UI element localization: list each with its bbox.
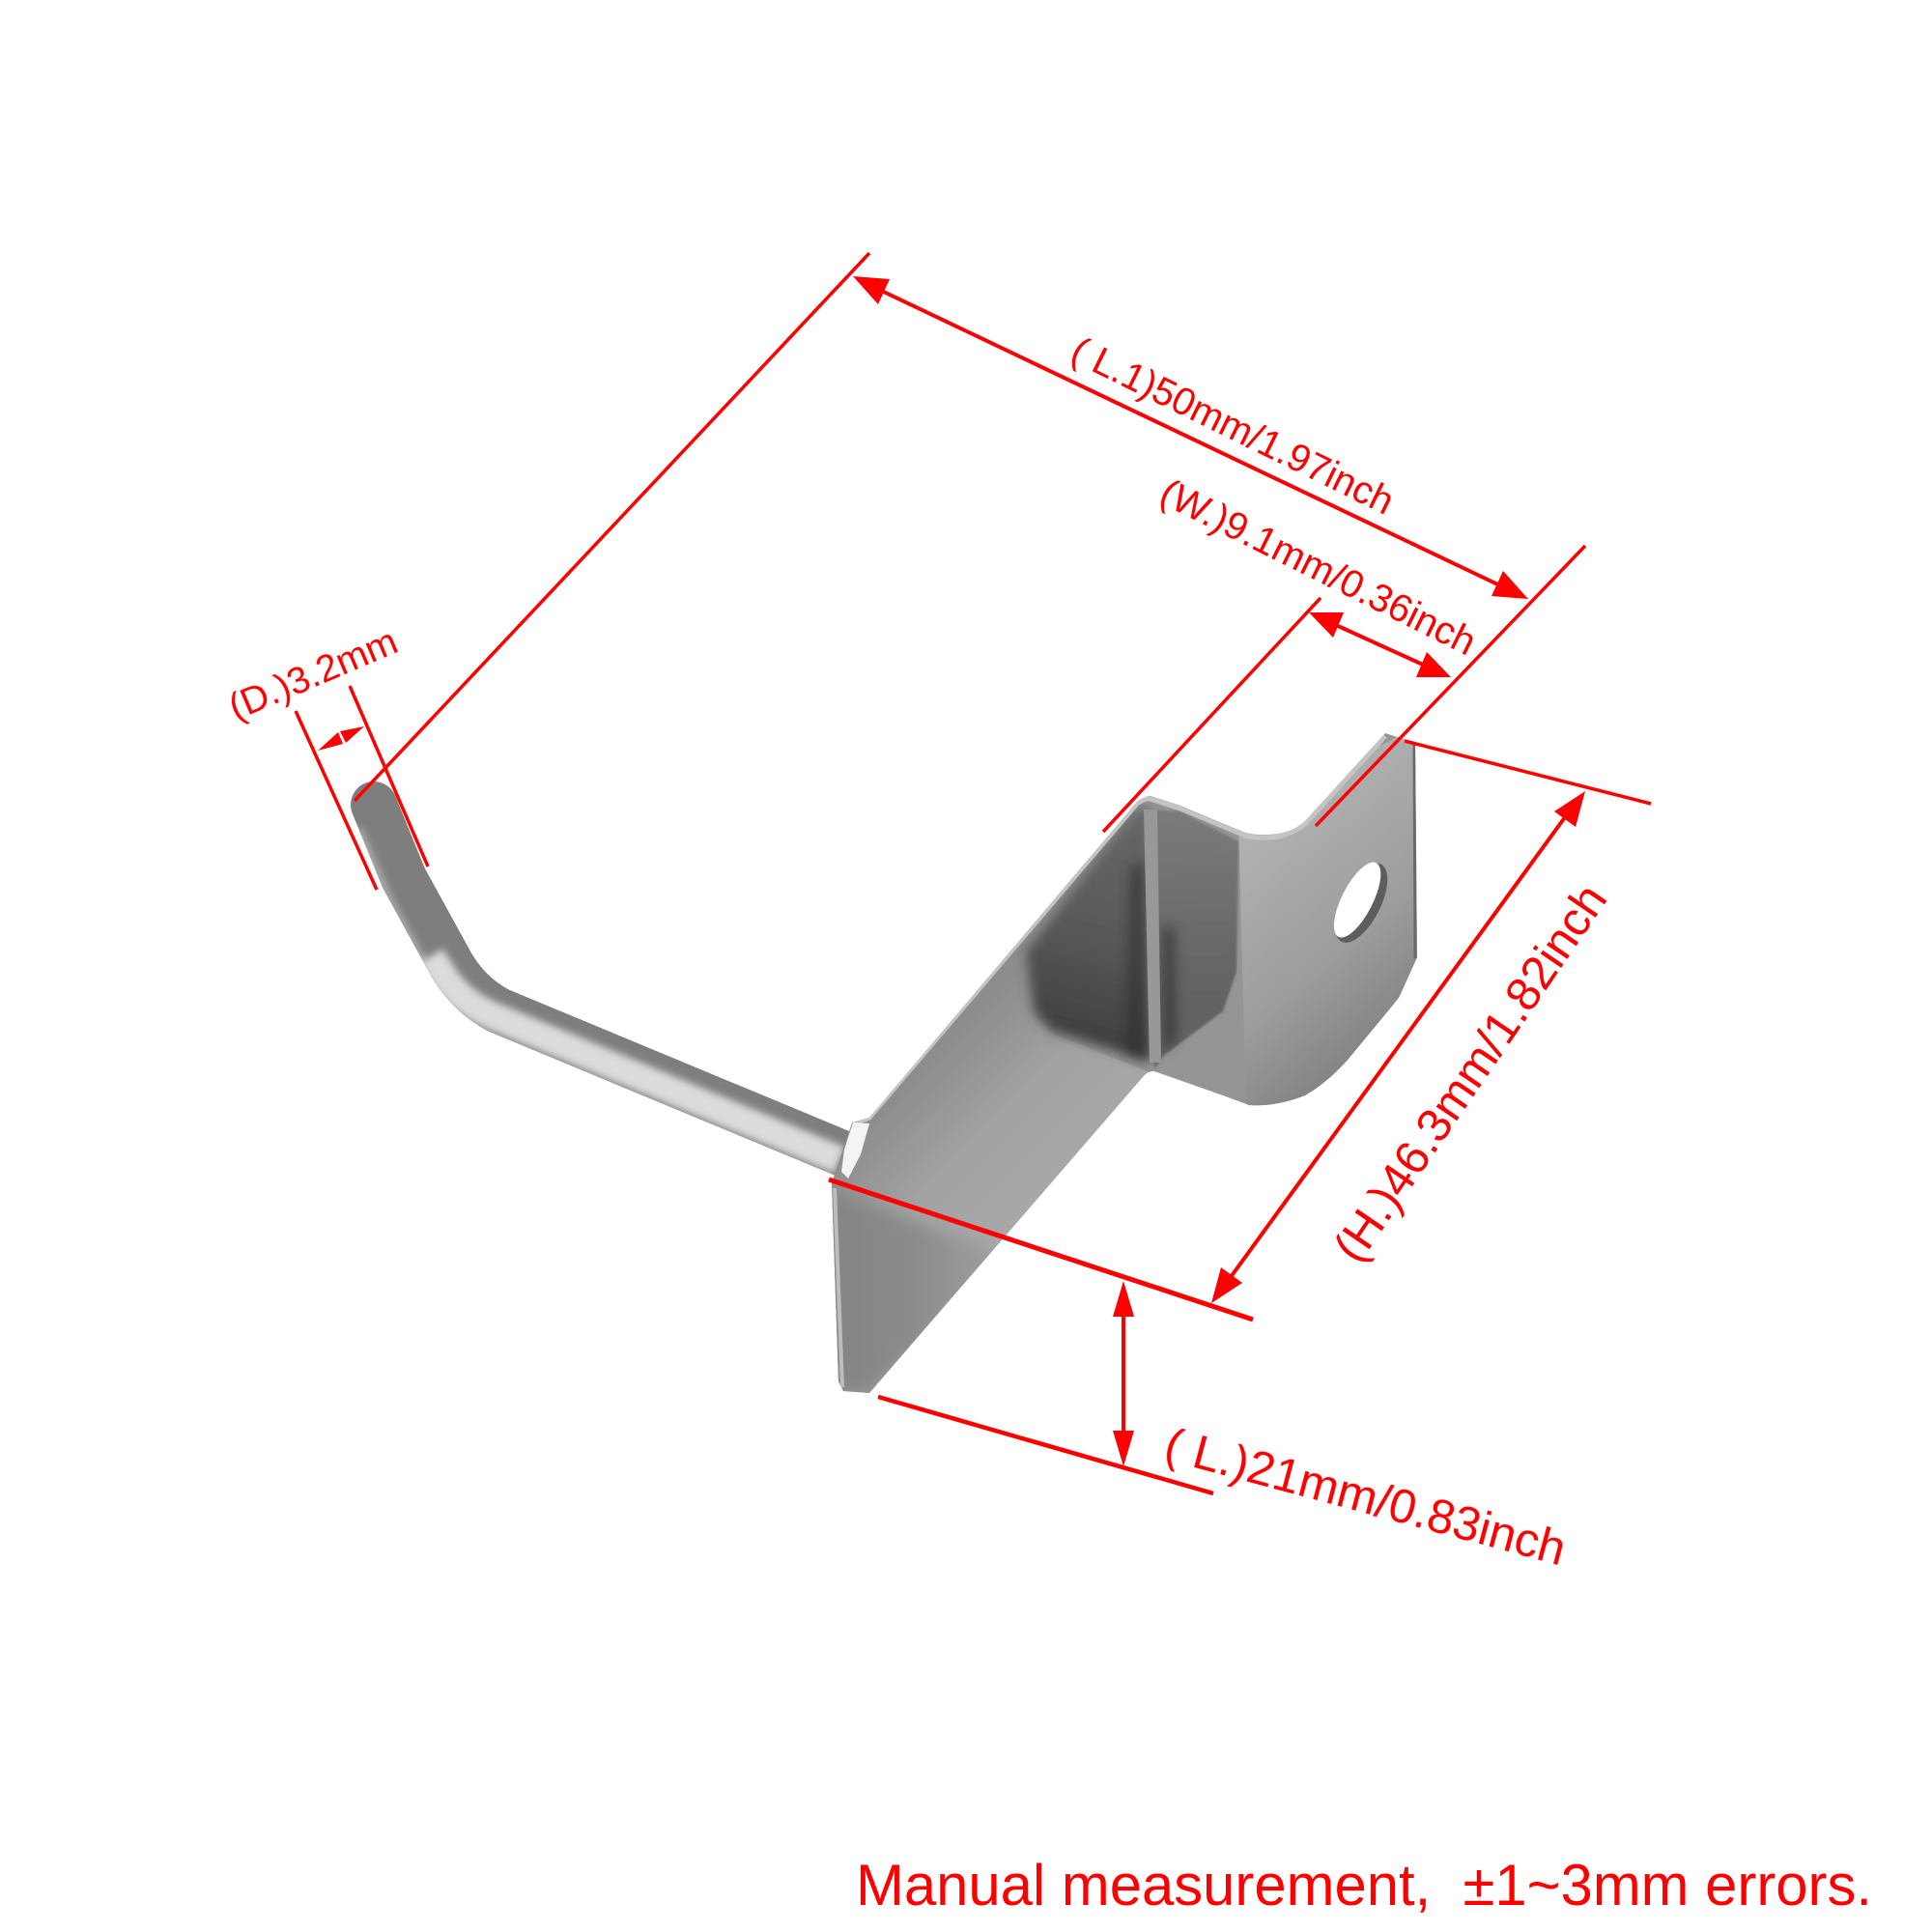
infographic: hook dimension diagram <box>232 251 1867 1913</box>
label: H height: (H.)46.3mm/1.82inch <box>1323 875 1617 1271</box>
note: measurement tolerance: Manual measurement, ±1~3mm errors. <box>856 1853 1872 1918</box>
dimension lines in red <box>296 253 1651 1493</box>
L1 extension line <box>355 253 869 801</box>
D arrowheads <box>318 726 364 751</box>
plate: right face with hole <box>1238 724 1420 1111</box>
H dimension shaft <box>1223 807 1573 1288</box>
plate: long lower face <box>832 865 1149 1393</box>
L extension line lower <box>878 1397 1213 1493</box>
label: D diameter: (D.)3.2mm <box>223 620 404 728</box>
H extension line <box>1405 741 1651 804</box>
H arrowheads <box>1211 791 1585 1303</box>
L vertical arrowheads <box>1113 1281 1134 1466</box>
W extension line left <box>1103 598 1321 832</box>
icon: metal mounting plate <box>826 724 1420 1396</box>
L vertical dimension shaft <box>1122 1299 1125 1449</box>
D extension line right <box>350 686 428 867</box>
plate: top rim highlight <box>854 736 1385 1123</box>
W extension line right <box>1316 546 1585 826</box>
weld spot <box>841 1122 869 1179</box>
label: L1 length: ( L.1)50mm/1.97inch <box>1065 329 1401 524</box>
icon: bent wire rod of the hook <box>357 805 842 1160</box>
label: W width: (W.)9.1mm/0.36inch <box>1153 471 1483 664</box>
label: L length: ( L.)21mm/0.83inch <box>1159 1418 1572 1576</box>
L1 dimension shaft <box>869 285 1510 590</box>
plate: shaded channel right wall <box>1151 810 1238 1068</box>
L1 arrowheads <box>853 276 1528 599</box>
plate: shaded channel left wall <box>1026 807 1151 1063</box>
W arrowheads <box>1309 612 1451 677</box>
plate: central seam <box>1144 810 1161 1063</box>
D extension line left <box>296 711 377 890</box>
L extension line upper <box>829 1179 1253 1320</box>
plate: right edge <box>1414 743 1415 958</box>
plate: mounting hole <box>1323 855 1398 951</box>
arrowheads <box>318 276 1585 1466</box>
plate: dark streaks beside seam <box>1126 860 1177 1058</box>
plate: left edge <box>835 1188 842 1387</box>
W dimension shaft <box>1325 620 1435 670</box>
plate: lower-left shaded area <box>832 1192 991 1393</box>
